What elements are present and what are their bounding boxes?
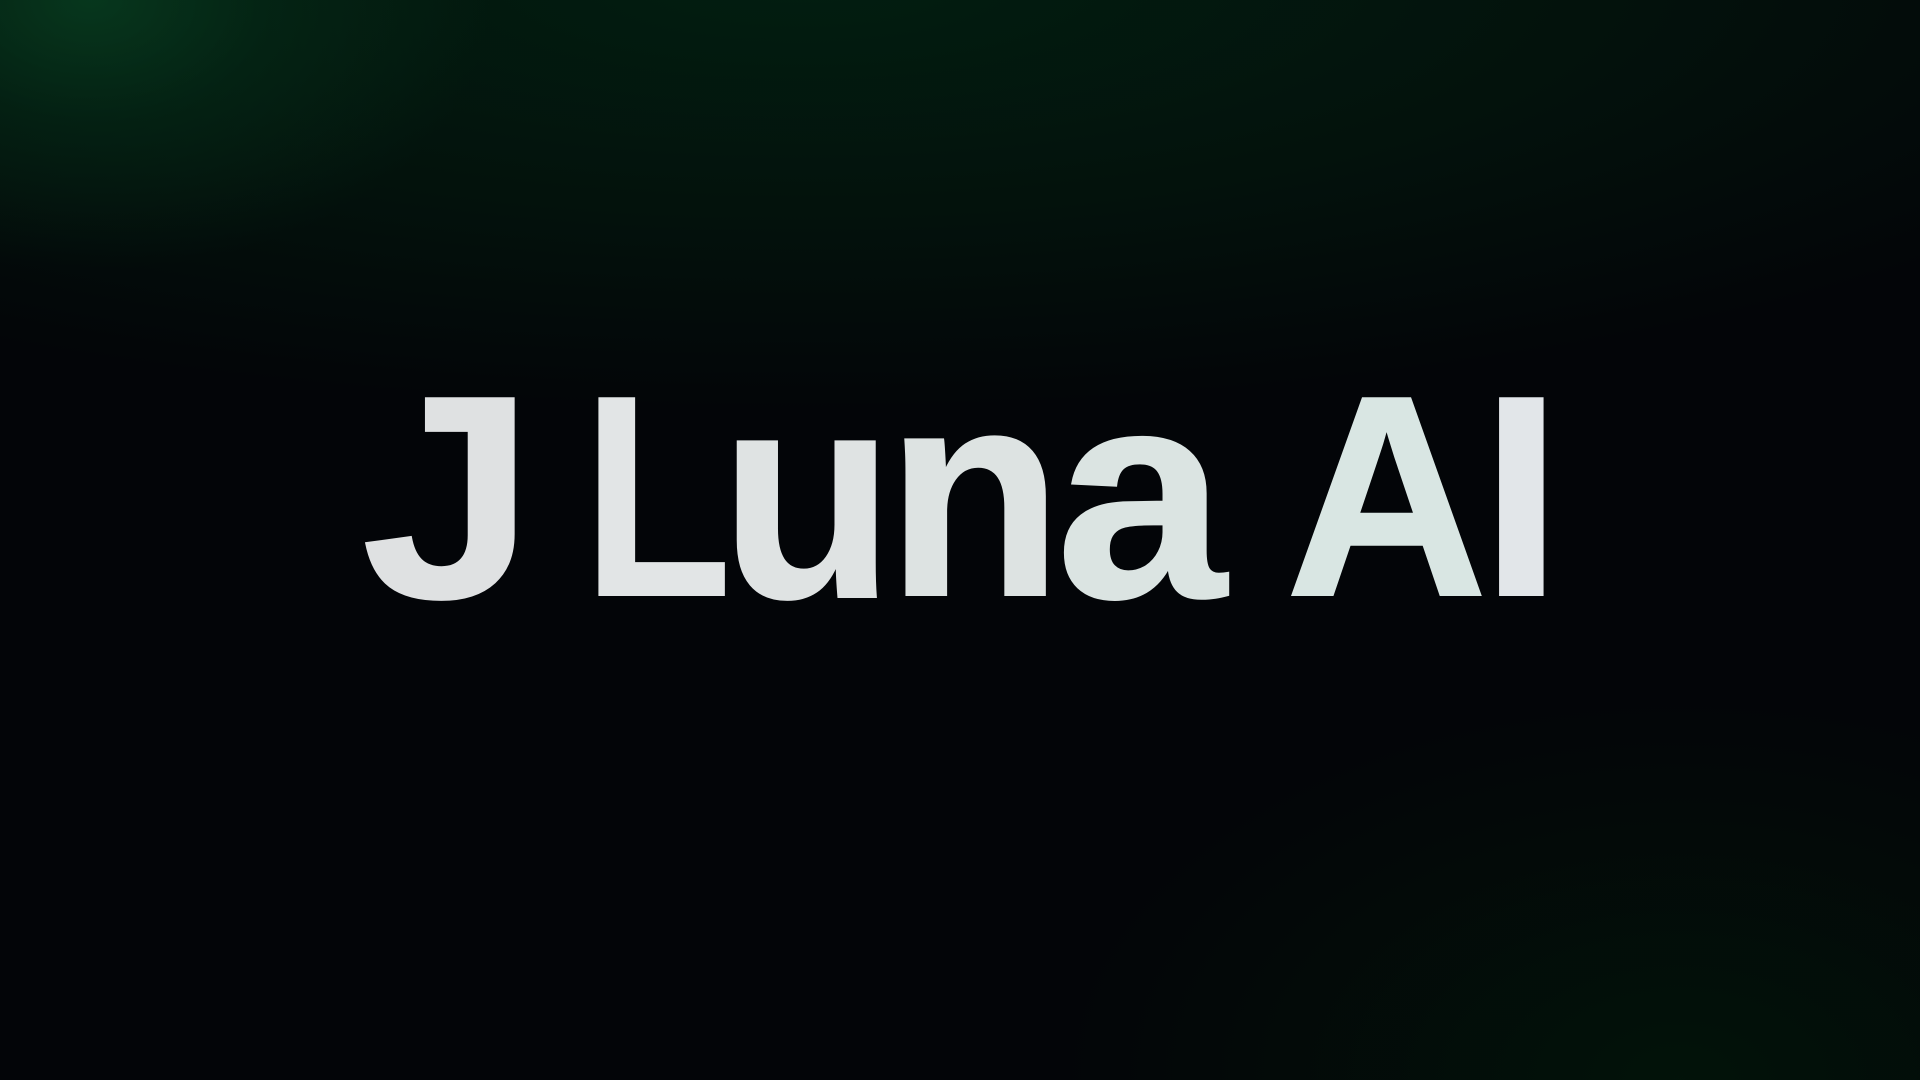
title: J Luna AI: u xyxy=(720,330,895,660)
title: J Luna AI: I xyxy=(1480,336,1562,656)
title: J Luna AI: J xyxy=(362,336,535,659)
title: J Luna AI: A xyxy=(1285,337,1488,657)
title: J Luna AI xyxy=(362,328,1562,660)
title: J Luna AI: a xyxy=(1056,328,1228,660)
title: J Luna AI: L xyxy=(583,337,731,656)
title: J Luna AI: n xyxy=(886,328,1063,658)
